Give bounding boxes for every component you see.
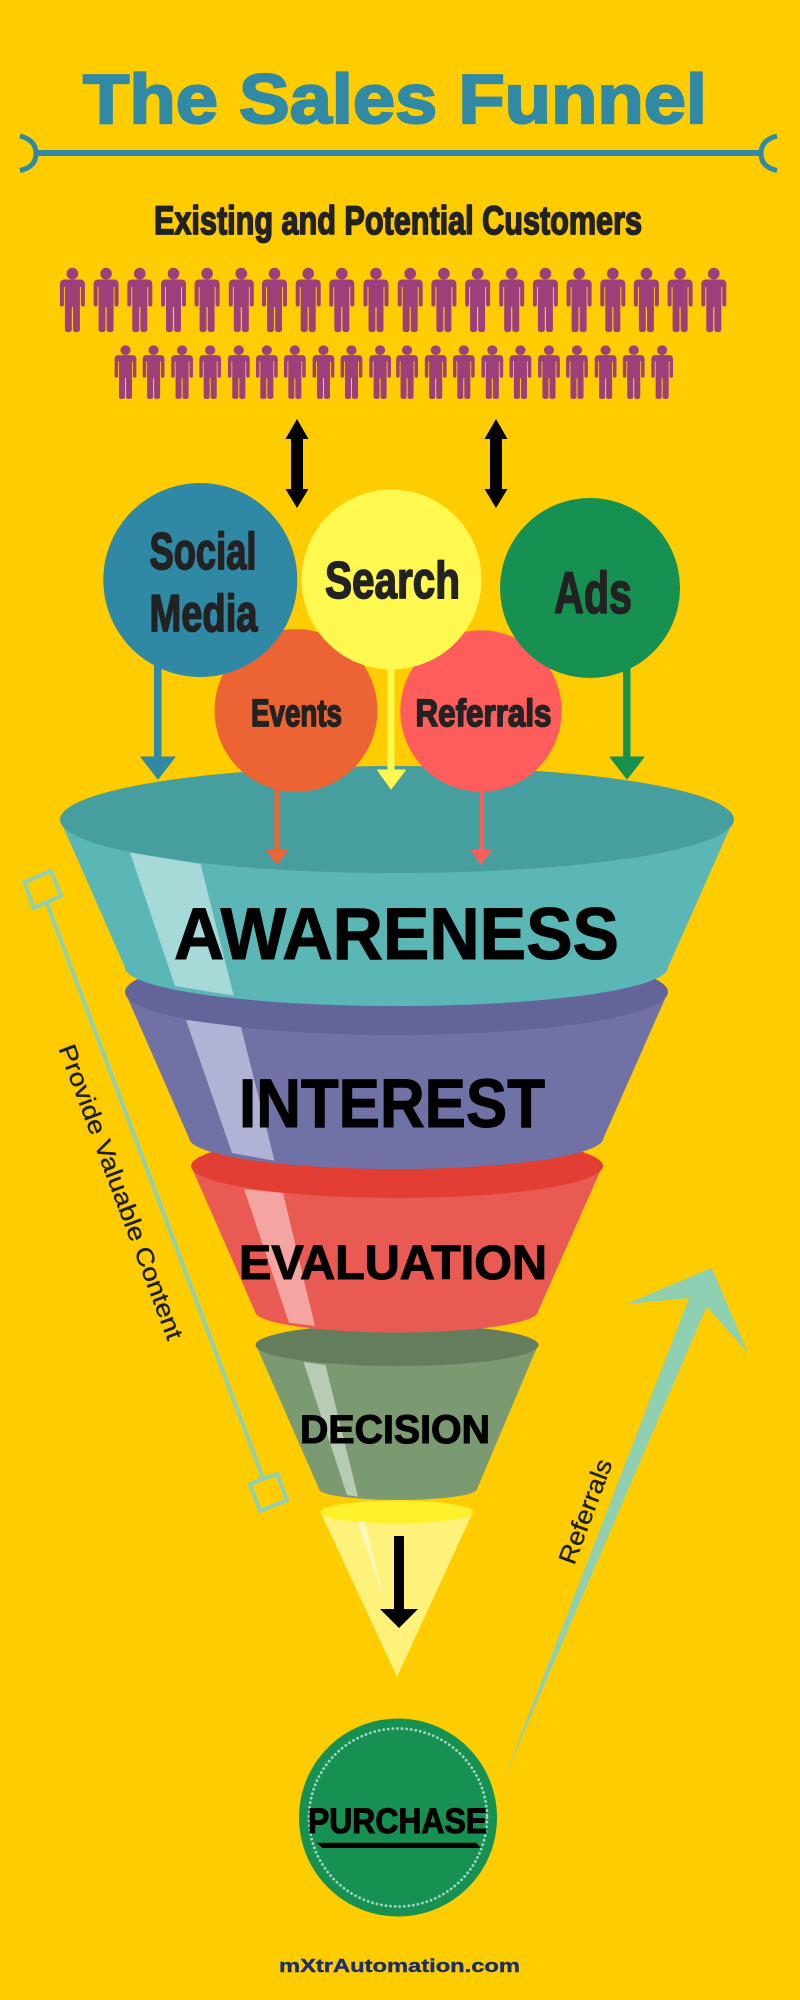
channel: social media xyxy=(103,483,297,677)
title: The Sales Funnel xyxy=(83,60,707,138)
channel: events: Events xyxy=(251,693,342,735)
channel: events xyxy=(214,629,378,792)
channel: social media: Social xyxy=(150,523,256,581)
channel: referrals: Referrals xyxy=(416,693,552,735)
purchase badge xyxy=(299,1718,497,1916)
arrow: ads to funnel xyxy=(610,665,644,779)
double arrow: right xyxy=(484,419,508,508)
people icons: second row xyxy=(115,345,673,399)
channel: social media: Media xyxy=(150,585,258,643)
funnel stage: decision xyxy=(256,1324,538,1500)
arrow: referrals to funnel xyxy=(470,790,492,865)
funnel stage: interest: INTEREST xyxy=(239,1065,545,1142)
funnel stage: evaluation: EVALUATION xyxy=(239,1237,547,1290)
subheading: existing and potential customers: Existing and Potential Customers xyxy=(154,199,642,243)
arrow: referrals loop xyxy=(504,1268,748,1780)
arrow: events to funnel xyxy=(266,790,288,865)
funnel stage: evaluation xyxy=(191,1134,603,1332)
funnel cone: purchase stage xyxy=(320,1500,474,1677)
double arrow: left xyxy=(286,419,308,508)
purchase badge: PURCHASE xyxy=(308,1802,487,1841)
channel: ads: Ads xyxy=(554,561,632,626)
funnel stage: interest xyxy=(125,949,668,1169)
funnel stage: awareness: AWARENESS xyxy=(174,894,619,975)
funnel stage: awareness xyxy=(60,766,734,1006)
footer: website: mXtrAutomation.com xyxy=(279,1956,520,1976)
channel: ads xyxy=(500,498,680,678)
channel: search xyxy=(302,490,482,670)
channel: referrals xyxy=(400,630,562,792)
title divider with bracket ends xyxy=(20,136,777,170)
arrow: social media to funnel xyxy=(141,665,175,779)
channel: search: Search xyxy=(325,552,460,610)
arrow: down inside cone xyxy=(380,1536,418,1628)
funnel stage: decision: DECISION xyxy=(300,1408,490,1452)
text: referrals: Referrals xyxy=(553,1455,618,1568)
arrow: search to funnel xyxy=(378,665,406,789)
text: provide valuable content: Provide Valuable Content xyxy=(53,1041,188,1344)
connector: provide valuable content xyxy=(24,871,287,1511)
people icons: first row xyxy=(60,268,726,332)
